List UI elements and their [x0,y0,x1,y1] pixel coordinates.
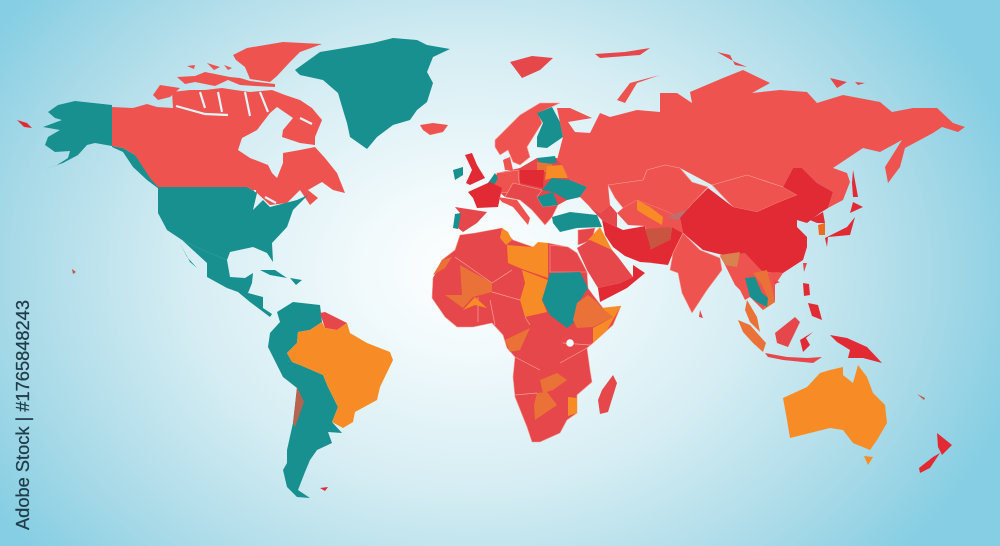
country: Ethiopia [573,295,613,328]
country: Belarus [545,165,568,180]
continent base [432,228,621,442]
country: New Zealand [919,433,952,473]
country: South Korea [818,223,825,235]
countries: Central Europe and Balkans [505,183,558,225]
countries: Indochina base [720,253,783,310]
country: Romania [537,192,558,207]
country: Turkey [552,212,602,232]
island: Aleutian west [17,120,32,128]
country: Ireland [453,167,463,180]
countries: Norway and Sweden [495,103,560,165]
region: Africa [432,228,621,442]
country: Somalia [593,306,621,343]
island: Taiwan [803,263,807,272]
countries: Central Asia base [617,200,683,233]
island: Fiji area [917,394,925,400]
island: Novaya Zemlya [617,75,660,103]
country: Gabon and Cameroon [505,328,530,352]
island: Severnaya Zemlya [717,52,747,67]
region: Europe [453,103,602,232]
island: Sulawesi [800,332,813,352]
country: Germany [492,170,520,193]
country: China [680,168,833,273]
region: Asia [510,48,965,363]
region: North America [17,38,450,317]
lake: Victoria [566,339,574,347]
country: United Kingdom [465,153,485,185]
region: Oceania [783,365,952,473]
island: Tasmania [864,456,873,465]
country: Denmark [503,157,513,170]
country: Mexico and Central America [180,240,272,317]
island: Franz Josef Land [595,48,650,58]
countries: continental Europe base [492,158,587,225]
country: Thailand [745,277,768,307]
country: Pakistan [650,227,683,265]
country: Alaska [43,101,163,192]
island: Sakhalin [852,170,858,197]
country: Sudan [542,272,588,328]
island: Svalbard [510,56,553,78]
country: Baltic states [537,156,557,164]
islands: Caribbean [260,270,302,285]
island: Madagascar [598,375,617,414]
countries: Guianas [320,312,347,330]
country: United States [158,187,308,262]
island: Banks [153,85,180,100]
islands: small northern [187,63,232,70]
country: Chad [520,270,548,317]
country: Australia [783,365,887,450]
country: Bangladesh and Nepal [720,252,740,267]
country: Laos and Vietnam [753,270,775,310]
island: Sri Lanka [699,310,703,318]
country: Chile accent [293,387,304,427]
country: Japan [825,202,863,247]
island: Borneo [775,317,800,347]
country: Saudi Arabia [577,240,633,288]
country: Libya [507,242,548,278]
region: South America [268,302,393,498]
country: Kyrgyzstan [667,208,692,220]
country: Iran [602,220,654,263]
country: Iraq [588,227,612,252]
country: Spain [455,207,487,232]
country: North Korea [810,212,825,223]
country: Mongolia [712,175,797,212]
country: Mali [445,265,492,308]
country: Netherlands [488,173,498,185]
peninsula: Malaysia [745,300,760,332]
channels of the Canadian Arctic [176,92,312,207]
country: Greenland [295,38,450,149]
island: Falklands [320,487,328,491]
island: Hawaii [72,269,76,274]
country: Finland [537,107,563,148]
islands: Arctic [510,48,865,103]
countries: Andean and southern states [268,302,342,498]
countries: Caucasus [588,205,617,227]
islands: Canadian Arctic [153,42,322,100]
island: Sumatra [738,320,766,352]
country: India [670,233,722,313]
islands: Philippines [803,283,822,320]
country: Afghanistan [645,227,672,253]
island: Iceland [420,123,448,135]
country: Brazil [287,322,393,428]
country: Tunisia [500,228,512,245]
country: Kazakhstan [608,165,708,218]
country: Zambia [540,373,567,393]
countries: Levant and Syria [578,228,595,245]
country: Uzbekistan [637,200,663,225]
country: Canada [112,88,345,205]
island: Hainan [773,280,780,284]
country: Yemen and Oman [598,265,645,302]
country: Ukraine [542,178,587,200]
island: Java [765,353,822,363]
country: Portugal [453,213,461,229]
country: Italy [498,197,530,225]
country: Lithuania [537,162,552,172]
country: Poland [520,170,544,188]
country: Mozambique [568,397,577,416]
country: Botswana [534,392,557,420]
island: New Guinea [830,335,882,363]
island: Ellesmere [233,42,322,82]
country: Russia [557,70,965,213]
islands: New Siberian [830,78,865,88]
country: Burkina Faso [463,297,487,310]
countries: internal borders [455,257,590,395]
country: Mauritania edge [433,257,452,275]
island: Queen Elizabeth band [177,72,275,87]
country: Egypt [550,245,587,272]
country: France [468,182,502,208]
image credit text: Adobe Stock | #1765848243 [12,300,33,530]
